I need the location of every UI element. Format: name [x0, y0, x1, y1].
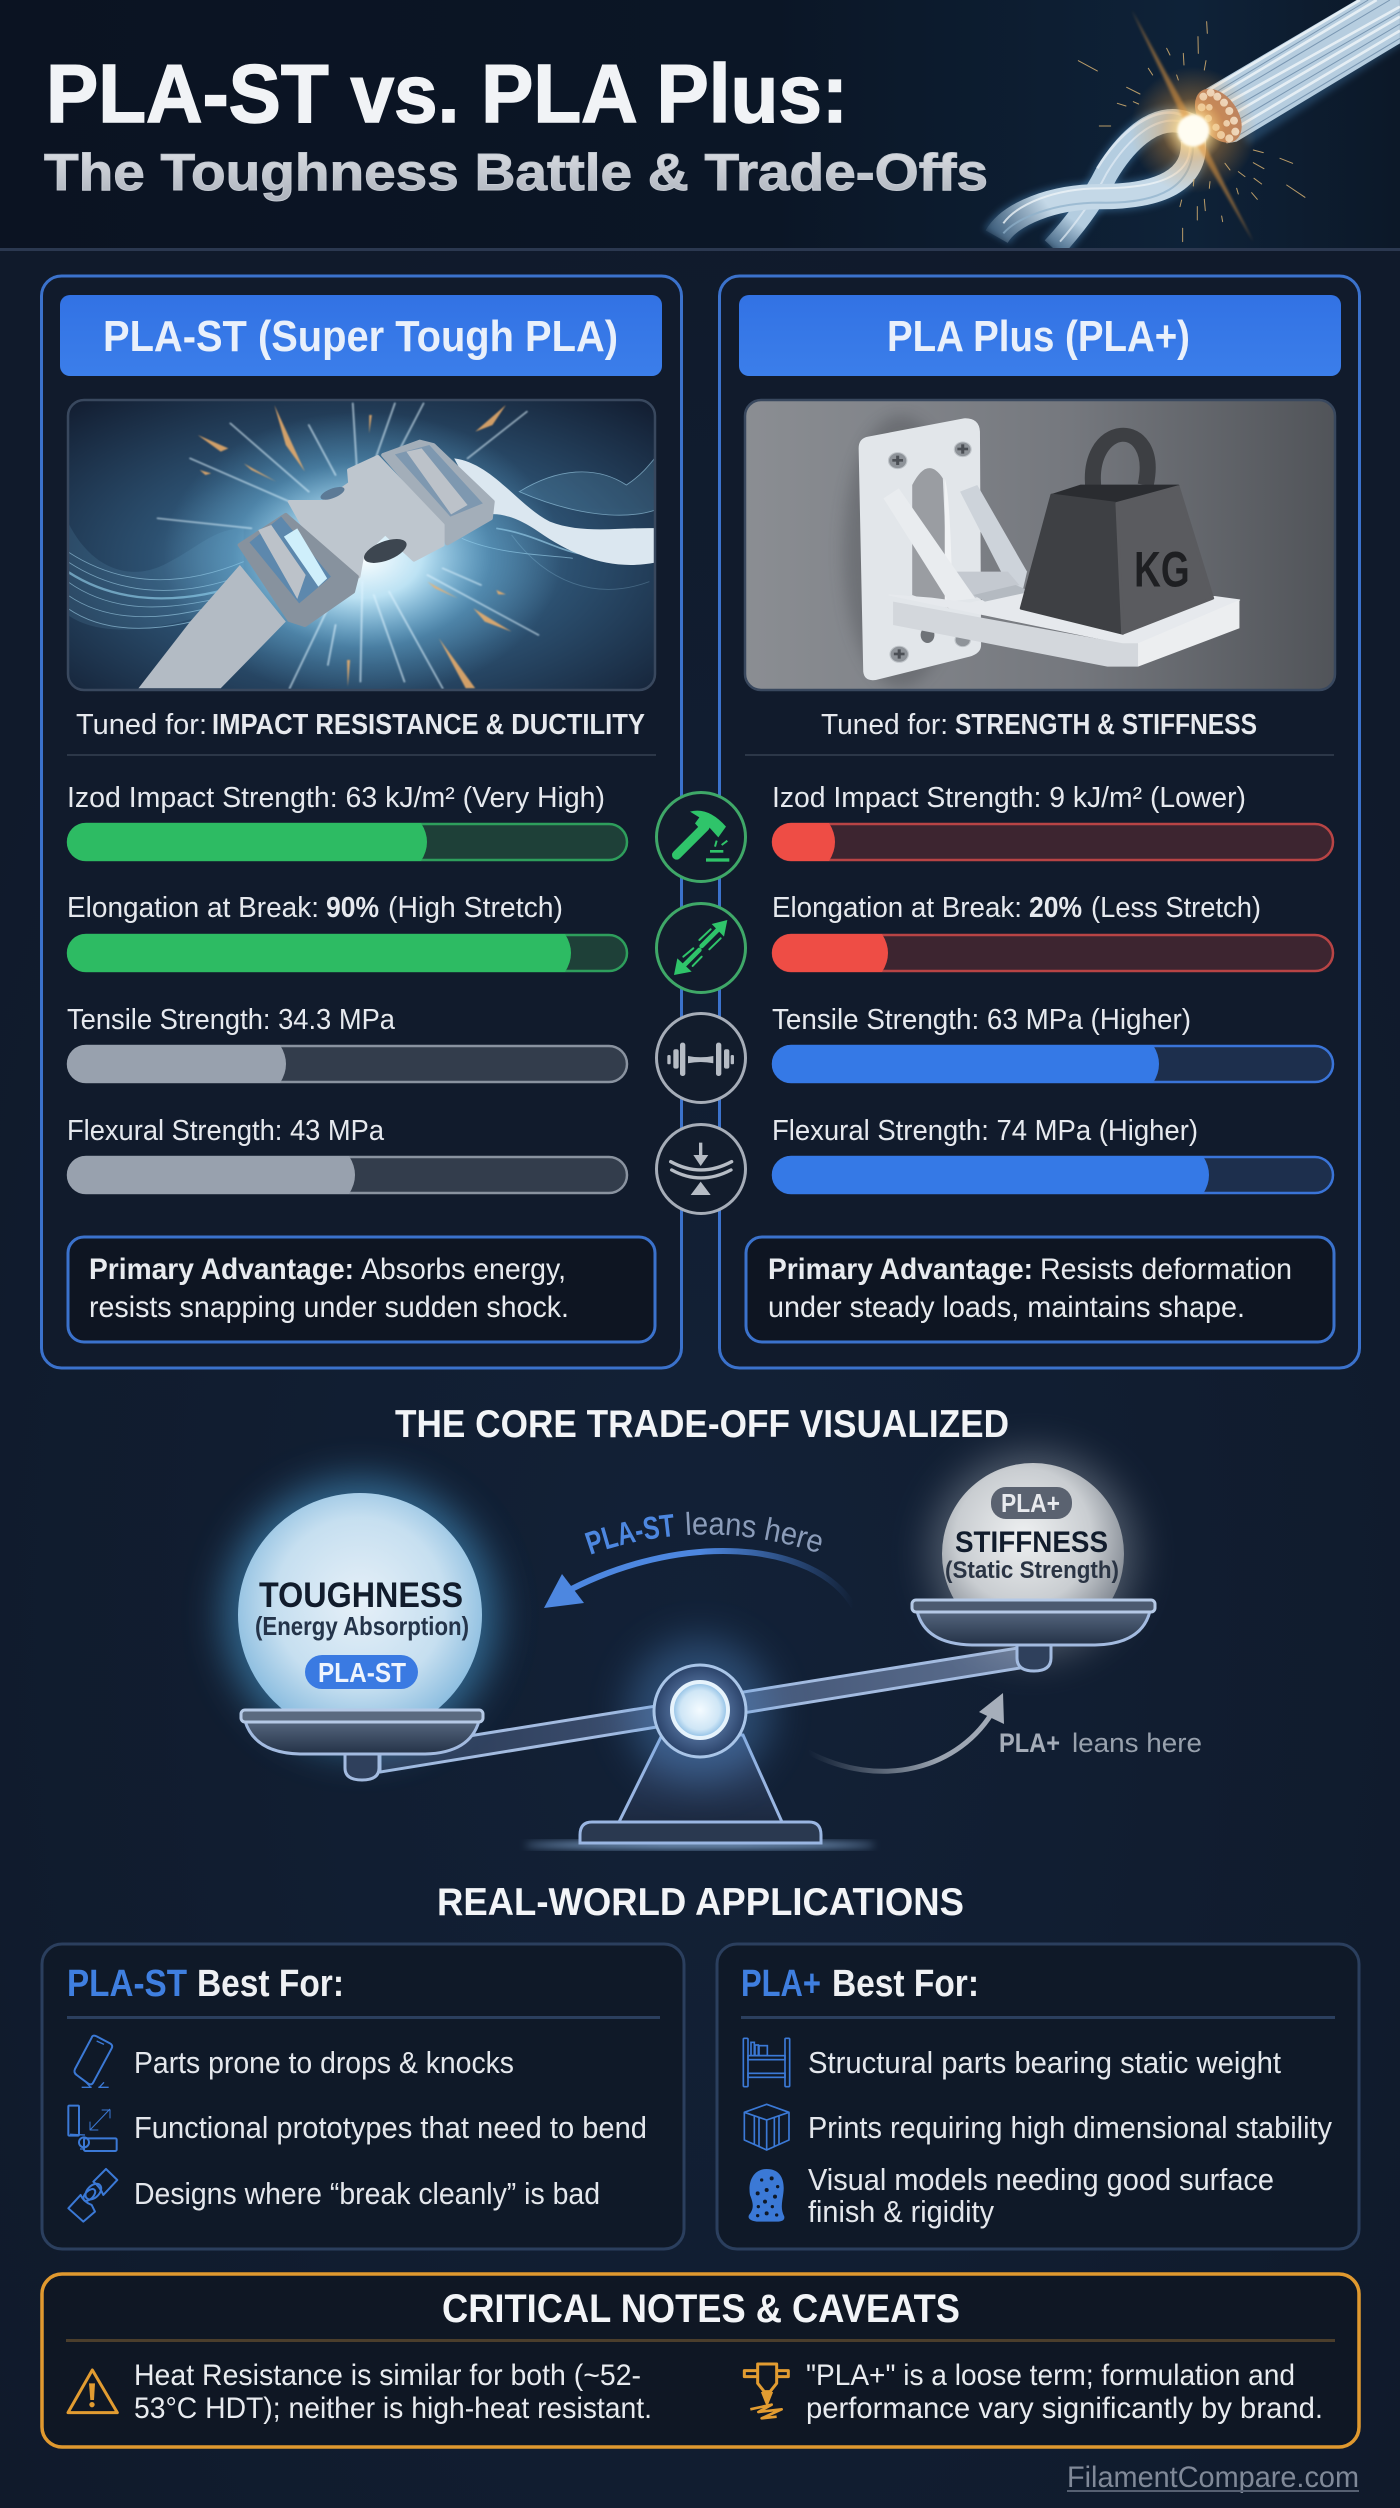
- left sphere: toughness: (Energy Absorption): [255, 1611, 469, 1641]
- metric: elongation: [67, 892, 627, 972]
- heading: CRITICAL NOTES & CAVEATS: [442, 2287, 960, 2331]
- right sphere: stiffness: [931, 1452, 1135, 1656]
- left sphere: toughness: PLA-ST: [318, 1657, 406, 1688]
- panel: PLA Plus: [720, 276, 1360, 1368]
- text: Designs where “break cleanly” is bad: [134, 2176, 600, 2211]
- beam: [380, 1648, 1026, 1772]
- right sphere: stiffness: PLA+: [1001, 1488, 1060, 1518]
- right sphere: stiffness: STIFFNESS: [955, 1526, 1108, 1559]
- icon: dumbbell: [656, 1014, 746, 1102]
- heading: real-world applications: REAL-WORLD APPLICATIONS: [437, 1881, 964, 1924]
- metric: elongation: [772, 892, 1333, 972]
- callout: primary advantage: under steady loads, maintains shape.: [768, 1291, 1245, 1324]
- icon: lattice head: [749, 2169, 784, 2222]
- text: heat: Heat Resistance is similar for both (~52-: [134, 2359, 641, 2392]
- icon: warning: [68, 2370, 117, 2413]
- label: PLA-ST leans here: leans here: [686, 1512, 822, 1552]
- callout: primary advantage: resists snapping under sudden shock.: [89, 1291, 569, 1324]
- straps: [454, 458, 660, 565]
- heading: core trade-off: THE CORE TRADE-OFF VISUALIZED: [395, 1403, 1009, 1446]
- text: Parts prone to drops & knocks: [134, 2045, 514, 2080]
- right sphere: stiffness: (Static Strength): [945, 1557, 1119, 1584]
- heading: [67, 1963, 344, 2005]
- metric: izod impact: [67, 782, 627, 861]
- panel: PLA-ST best for: [42, 1944, 684, 2249]
- callout: primary advantage: [746, 1237, 1334, 1342]
- arrow: toward toughness: [544, 1551, 854, 1608]
- text: PLA+ term: performance vary significantly by brand.: [806, 2392, 1323, 2425]
- buckle: left frame: [240, 515, 357, 625]
- text: Prints requiring high dimensional stability: [808, 2110, 1332, 2145]
- rays: [158, 403, 538, 688]
- metric: flexural: [67, 1115, 627, 1194]
- callout: primary advantage: Primary Advantage:: [89, 1253, 354, 1286]
- panel: PLA+ best for: [717, 1944, 1359, 2249]
- icon: nozzle: [744, 2364, 788, 2418]
- icon: flexural bend: [656, 1124, 746, 1214]
- text: Functional prototypes that need to bend: [134, 2110, 647, 2145]
- heading: PLA-ST: PLA-ST (Super Tough PLA): [103, 312, 618, 361]
- label: PLA+ leans here: PLA+: [999, 1728, 1060, 1758]
- floor glow: [525, 1842, 875, 1848]
- text: tuned for: [76, 709, 645, 741]
- footer: source: FilamentCompare.com: [1067, 2461, 1359, 2494]
- metric: elongation: Elongation at Break:: [772, 892, 1022, 924]
- label: PLA+ leans here: leans here: [1072, 1728, 1202, 1758]
- icon: shelf: [743, 2038, 790, 2087]
- orange sparks: [198, 405, 512, 688]
- heading: Best For:: [832, 1963, 979, 2005]
- metric: elongation: (High Stretch): [388, 892, 563, 924]
- header band: [0, 0, 1400, 251]
- label: PLA-ST leans here: [584, 1512, 822, 1554]
- shelf: [889, 592, 1239, 643]
- text: tuned for: [821, 709, 1257, 741]
- callout: primary advantage: [68, 1237, 655, 1342]
- label: PLA+ leans here: [999, 1728, 1202, 1758]
- text: Structural parts bearing static weight: [808, 2045, 1281, 2080]
- text: tuned for: Tuned for:: [76, 709, 207, 741]
- stand: [580, 1735, 821, 1843]
- metric: tensile: [67, 1004, 627, 1083]
- metric: flexural: [772, 1115, 1333, 1194]
- icon: hammer impact: [656, 792, 746, 882]
- text: heat: [134, 2359, 652, 2425]
- text: finish & rigidity: [808, 2194, 994, 2229]
- icon: dropped phone: [74, 2036, 112, 2087]
- heading: PLA+: [741, 1963, 821, 2005]
- title: PLA-ST vs. PLA Plus:: [46, 47, 848, 140]
- heading: PLA Plus: PLA Plus (PLA+): [887, 312, 1190, 361]
- text: PLA+ term: "PLA+" is a loose term; formulation and: [806, 2359, 1295, 2392]
- right pan: [912, 1600, 1155, 1671]
- heading: [741, 1963, 979, 2005]
- text: [808, 2162, 1274, 2229]
- icon: stretch arrows: [656, 904, 746, 992]
- left sphere: toughness: TOUGHNESS: [259, 1576, 463, 1615]
- icon: cube: [744, 2104, 789, 2150]
- icon: linked parts: [68, 2169, 117, 2222]
- callout: primary advantage: Absorbs energy,: [361, 1253, 566, 1286]
- left sphere: toughness: [224, 1479, 496, 1751]
- heading: PLA Plus: [739, 295, 1341, 376]
- heading: PLA-ST: [67, 1963, 187, 2005]
- metric: elongation: (Less Stretch): [1091, 892, 1261, 924]
- metric: flexural: Flexural Strength: 74 MPa (Higher): [772, 1115, 1198, 1147]
- heading: PLA-ST: [60, 295, 662, 376]
- label: PLA-ST leans here: PLA-ST: [584, 1514, 674, 1554]
- text: tuned for: Tuned for:: [821, 709, 948, 741]
- chart: balance scale: [200, 1433, 1202, 1851]
- left pan: [241, 1710, 483, 1780]
- image: bracket holding KG weight: [740, 395, 1340, 695]
- heading: Best For:: [197, 1963, 344, 2005]
- metric: tensile: Tensile Strength: 63 MPa (Higher): [772, 1004, 1191, 1036]
- icon: hinge bend: [68, 2106, 117, 2151]
- buckle: center body: [290, 457, 443, 577]
- arrow: toward stiffness: [808, 1693, 1004, 1771]
- metric: izod impact: [772, 782, 1333, 861]
- subtitle: The Toughness Battle & Trade-Offs: [44, 144, 988, 202]
- energy waves: [68, 452, 660, 630]
- text: PLA+ term: [806, 2359, 1323, 2425]
- metric: izod impact: Izod Impact Strength: 63 kJ/m² (Very High): [67, 782, 605, 814]
- callout: primary advantage: Resists deformation: [1040, 1253, 1292, 1286]
- buckle: right frame: [383, 442, 492, 543]
- metric: elongation: Elongation at Break:: [67, 892, 319, 924]
- metric: elongation: 90%: [326, 892, 379, 924]
- panel: PLA-ST: [42, 276, 682, 1368]
- metric: tensile: [772, 1004, 1333, 1083]
- metric: elongation: 20%: [1029, 892, 1082, 924]
- cut end: [1194, 88, 1242, 143]
- header art: snapping filament: [997, 0, 1400, 248]
- text: Visual models needing good surface: [808, 2162, 1274, 2197]
- metric: flexural: Flexural Strength: 43 MPa: [67, 1115, 385, 1147]
- text: tuned for: STRENGTH & STIFFNESS: [955, 709, 1257, 741]
- panel: critical notes: [42, 2274, 1359, 2447]
- image: bracket holding KG weight: KG: [1134, 542, 1190, 598]
- image: flexing buckle with impact burst: [60, 395, 660, 698]
- metric: tensile: Tensile Strength: 34.3 MPa: [67, 1004, 396, 1036]
- callout: primary advantage: Primary Advantage:: [768, 1253, 1033, 1286]
- pivot: [628, 1639, 772, 1783]
- text: tuned for: IMPACT RESISTANCE & DUCTILITY: [212, 709, 645, 741]
- icon column: [656, 792, 746, 1214]
- text: heat: 53°C HDT); neither is high-heat resistant.: [134, 2392, 652, 2425]
- metric: izod impact: Izod Impact Strength: 9 kJ/m² (Lower): [772, 782, 1246, 814]
